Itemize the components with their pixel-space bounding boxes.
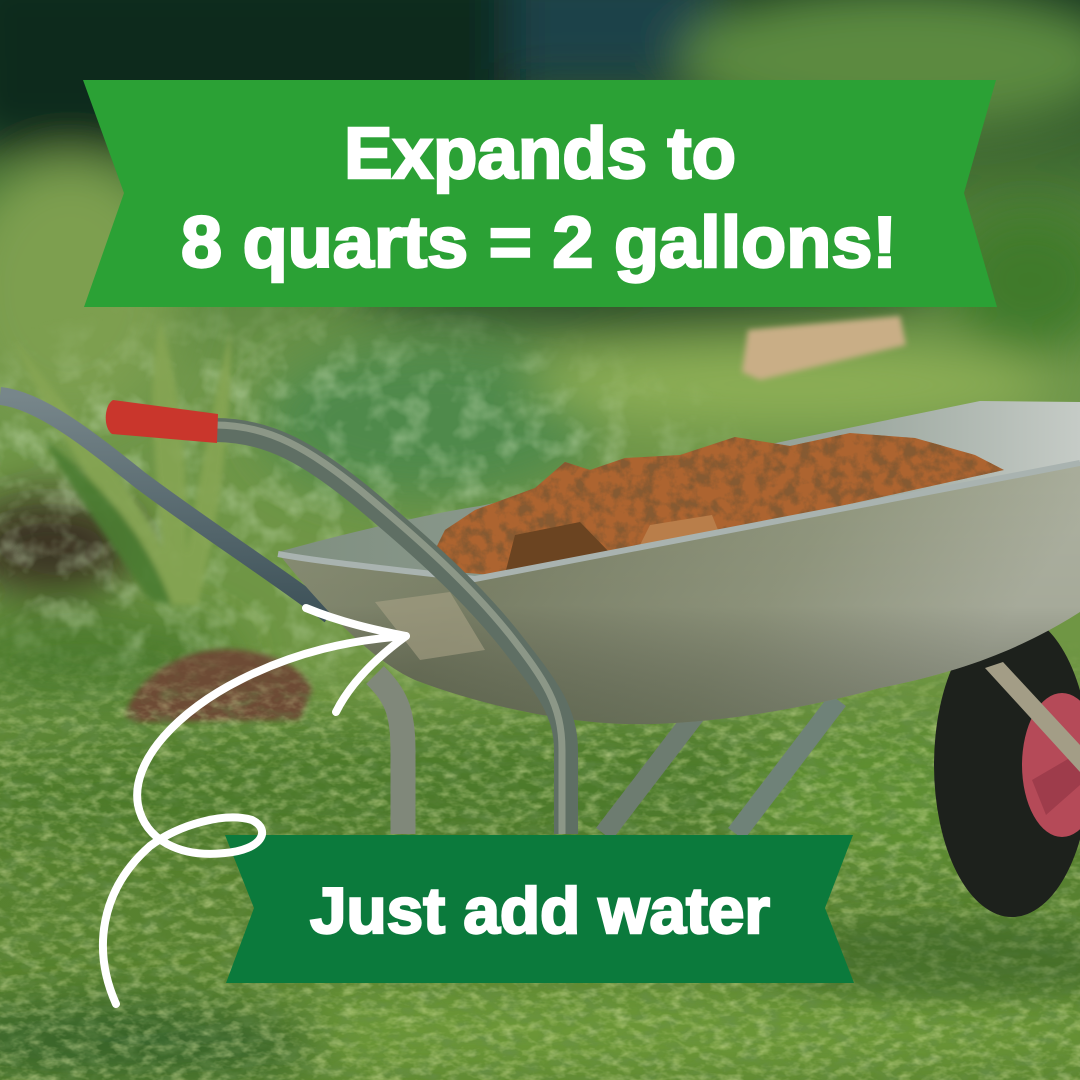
barrow rim [278,463,1080,579]
decorative spiky plant [15,320,230,605]
barrow interior [278,401,1080,585]
rear handle [0,396,330,615]
barrow body [278,462,1080,724]
barrow legs [375,675,838,834]
top banner [83,80,997,307]
barrow label [375,592,485,660]
soil pile [430,433,1004,576]
bottom banner [225,835,854,983]
decorative wooden block [742,316,906,380]
red handle grip [106,400,218,443]
headline: Expands to [344,114,736,194]
front handle and brace [215,425,566,834]
headline [181,114,897,283]
headline: 8 quarts = 2 gallons! [181,203,897,283]
wheel [934,613,1080,917]
icon: curly white arrow [103,608,406,1004]
subheading: Just add water [310,874,770,947]
decorative stone [125,649,312,722]
